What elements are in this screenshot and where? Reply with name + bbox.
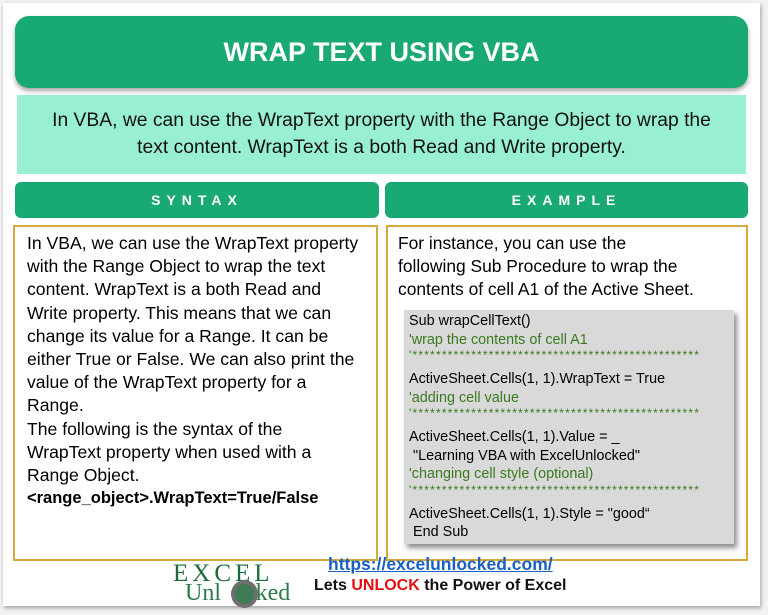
syntax description (27, 233, 358, 485)
code box: 'adding cell value ActiveSheet.Cells(1, 1).Value = _ (409, 390, 620, 445)
intro text block (17, 95, 746, 174)
panel: example (386, 225, 748, 561)
intro text block: text content. WrapText is a both Read and Write property. (137, 137, 626, 158)
syntax description: The following is the syntax of the (27, 419, 282, 439)
syntax description: In VBA, we can use the WrapText property (27, 233, 358, 253)
example description: contents of cell A1 of the Active Sheet. (398, 279, 694, 299)
code box: End Sub (413, 524, 468, 540)
code box: Sub wrapCellText() (409, 313, 531, 329)
header: syntax: SYNTAX (151, 192, 243, 208)
header: syntax (15, 182, 379, 218)
syntax description: with the Range Object to wrap the text (27, 256, 325, 276)
syntax description: Range Object. (27, 465, 139, 485)
header: example: EXAMPLE (512, 192, 621, 208)
title banner: WRAP TEXT USING VBA (223, 37, 540, 67)
syntax description: Range. (27, 395, 84, 415)
code box: "Learning VBA with ExcelUnlocked" (413, 448, 640, 464)
example description (398, 233, 694, 299)
logo: Excel Unlocked: Unl cked (185, 580, 290, 606)
header: example (385, 182, 748, 218)
code box: 'changing cell style (optional) ActiveSheet.Cells(1, 1).Style = "good“ (409, 466, 650, 522)
syntax description: either True or False. We can also print the (27, 349, 354, 369)
code box (404, 310, 734, 544)
logo: Excel Unlocked: EXCEL (173, 560, 274, 587)
title banner (15, 16, 748, 88)
example description: following Sub Procedure to wrap the (398, 256, 677, 276)
syntax description: value of the WrapText property for a (27, 372, 306, 392)
icon: padlock (231, 580, 258, 608)
syntax code line: <range_object>.WrapText=True/False (27, 489, 318, 507)
syntax description: content. WrapText is a both Read and (27, 279, 321, 299)
code box: 'wrap the contents of cell A1 ActiveSheet.Cells(1, 1).WrapText = True (409, 332, 665, 387)
tagline: Lets UNLOCK the Power of Excel (314, 577, 566, 594)
syntax description: Write property. This means that we can (27, 303, 331, 323)
syntax description: change its value for a Range. It can be (27, 326, 328, 346)
intro text block: In VBA, we can use the WrapText property with the Range Object to wrap the (52, 110, 711, 131)
link: https://excelunlocked.com/ (328, 554, 553, 574)
logo: Excel Unlocked (173, 560, 290, 608)
example description: For instance, you can use the (398, 233, 626, 253)
panel: syntax (13, 225, 378, 561)
syntax description: WrapText property when used with a (27, 442, 311, 462)
